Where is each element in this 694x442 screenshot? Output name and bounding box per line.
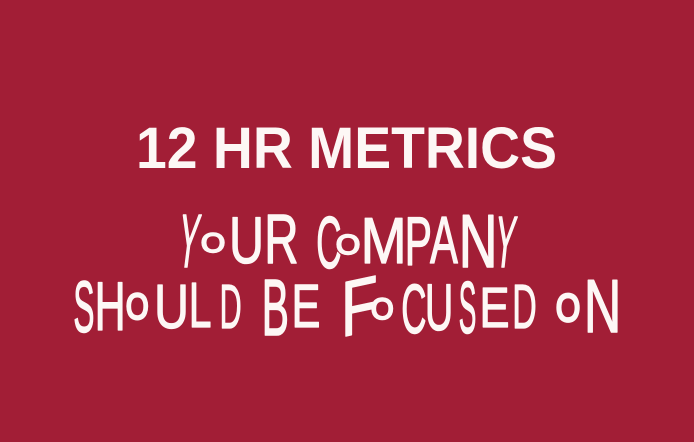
subtitle line 2: SHOULD BE FOCUSED ON: E	[479, 276, 510, 339]
subtitle line 1: YOUR COMPANY: O	[336, 229, 360, 261]
subtitle line 2: SHOULD BE FOCUSED ON: O	[371, 293, 394, 326]
subtitle line 2: SHOULD BE FOCUSED ON: S	[73, 267, 94, 348]
subtitle line 1: YOUR COMPANY	[174, 199, 520, 285]
subtitle line 2: SHOULD BE FOCUSED ON: L	[189, 270, 211, 341]
subtitle line 2: SHOULD BE FOCUSED ON: H	[95, 269, 126, 346]
subtitle line 1: YOUR COMPANY: A	[430, 203, 458, 277]
subtitle line 2: SHOULD BE FOCUSED ON: E	[292, 273, 320, 341]
subtitle line 2: SHOULD BE FOCUSED ON: F	[341, 258, 378, 354]
subtitle line 2: SHOULD BE FOCUSED ON: C	[401, 270, 426, 348]
subtitle line 2: SHOULD BE FOCUSED ON: D	[220, 272, 242, 342]
subtitle line 1: YOUR COMPANY: C	[316, 203, 342, 285]
subtitle line 2: SHOULD BE FOCUSED ON: O	[126, 286, 149, 327]
subtitle line 2: SHOULD BE FOCUSED ON: N	[584, 263, 621, 348]
subtitle line 2: SHOULD BE FOCUSED ON: D	[512, 271, 537, 342]
subtitle line 1: YOUR COMPANY: M	[361, 204, 407, 277]
subtitle line 1: YOUR COMPANY: O	[201, 229, 225, 259]
title: 12 HR METRICS: 12 HR METRICS	[136, 116, 557, 181]
subtitle line 1: YOUR COMPANY: Y	[491, 201, 520, 283]
subtitle line 2: SHOULD BE FOCUSED ON: S	[459, 266, 476, 349]
subtitle line 1: YOUR COMPANY: R	[264, 200, 298, 278]
subtitle line 2: SHOULD BE FOCUSED ON: O	[556, 287, 580, 330]
subtitle line 2: SHOULD BE FOCUSED ON	[73, 258, 621, 354]
subtitle line 1: YOUR COMPANY: N	[459, 199, 497, 283]
subtitle line 2: SHOULD BE FOCUSED ON: U	[425, 272, 453, 345]
subtitle line 1: YOUR COMPANY: U	[229, 205, 264, 278]
subtitle line 2: SHOULD BE FOCUSED ON: U	[154, 271, 189, 341]
subtitle line 2: SHOULD BE FOCUSED ON: B	[262, 264, 289, 353]
subtitle line 1: YOUR COMPANY: Y	[174, 200, 204, 284]
subtitle line 1: YOUR COMPANY: P	[405, 203, 432, 280]
